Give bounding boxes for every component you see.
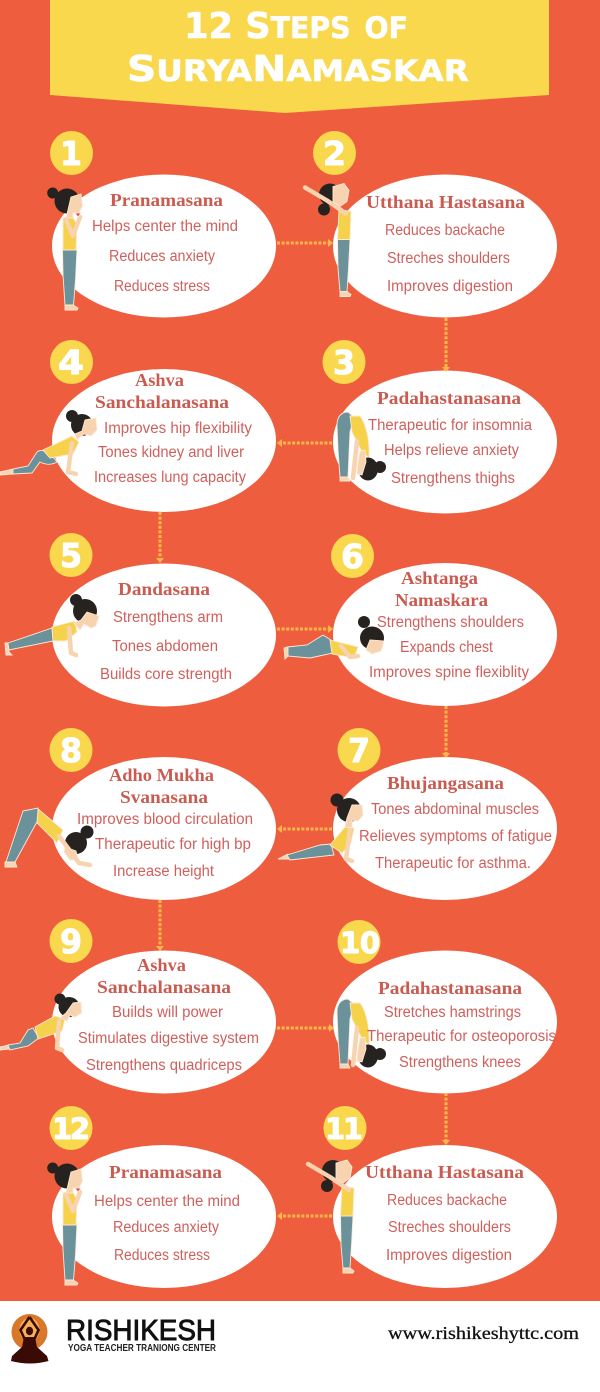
step 9 badge: 9 — [60, 922, 82, 961]
step 1 badge — [50, 131, 93, 175]
icon: raised arms pose — [305, 184, 351, 296]
panel: Dandasana step 5: Strengthens arm — [113, 609, 223, 626]
panel: Dandasana step 5 — [5, 564, 276, 706]
panel: Padahastanasana step 10: Stretches hamstrings — [384, 1004, 521, 1021]
arrow: 1 to 2 — [277, 239, 333, 247]
panel: Uttana Hastasana step 11: Utthana Hastasana — [365, 1162, 524, 1182]
panel: Uttana Hastasana step 11: Improves digestion — [386, 1247, 512, 1264]
title banner — [50, 0, 549, 113]
arrow: 7 to 8 — [277, 825, 332, 833]
step 3 badge — [322, 340, 366, 384]
arrow: 11 to 12 — [277, 1212, 332, 1220]
panel: Ashva Sanchalanasana step 9 — [0, 950, 276, 1094]
panel: Padahastanasana step 3: Strengthens thighs — [391, 470, 515, 487]
icon: standing prayer pose — [47, 188, 82, 310]
arrow: 5 to 6 — [277, 625, 333, 633]
step 4 badge: 4 — [58, 343, 84, 382]
panel: Adho Mukha Svanasana step 8: Therapeutic for high bp — [95, 836, 251, 853]
panel: Pranamasana step 1: Helps center the mind — [92, 218, 238, 235]
panel: Ashva Sanchalanasana step 9: Sanchalanasana — [97, 977, 231, 997]
panel: Padahastanasana step 3: Therapeutic for insomnia — [368, 417, 532, 434]
icon: eight limbs pose — [284, 616, 384, 659]
panel: Utthana Hastasana step 2: Improves digestion — [387, 278, 513, 295]
panel: Ashva Sanchalanasana step 9: Ashva — [137, 955, 186, 975]
panel: Bhujangasana step 7: Therapeutic for asthma. — [375, 855, 531, 872]
panel: Pranamasana step 12: Pranamasana — [109, 1162, 222, 1182]
panel: Padahastanasana step 10: Strengthens knees — [399, 1054, 521, 1071]
panel: Pranamasana step 1 — [47, 174, 276, 318]
panel: Bhujangasana step 7 — [278, 757, 557, 900]
step 5 badge: 5 — [60, 536, 82, 575]
panel: Bhujangasana step 7: Bhujangasana — [387, 773, 504, 793]
icon: plank pose — [5, 594, 99, 655]
panel: Padahastanasana step 3: Helps relieve anxiety — [384, 442, 519, 459]
panel: Pranamasana step 12: Helps center the mind — [94, 1193, 240, 1210]
panel: Ashva Sanchalanasana step 4: Sanchalanasana — [95, 392, 229, 412]
arrow: 2 to 3 — [442, 318, 450, 372]
panel: Ashva Sanchalanasana step 9: Stimulates digestive system — [78, 1030, 259, 1047]
panel: Pranamasana step 12: Reduces stress — [114, 1247, 210, 1264]
panel: Utthana Hastasana step 2: Streches shoulders — [387, 250, 510, 267]
panel: Dandasana step 5: Builds core strength — [100, 666, 232, 683]
step 7 badge — [338, 728, 380, 772]
step 2 badge — [313, 131, 356, 175]
step 2 badge: 2 — [323, 134, 346, 173]
panel: Ashva Sanchalanasana step 4 — [0, 369, 276, 512]
panel: Ashva Sanchalanasana step 9: Strengthens quadriceps — [86, 1057, 242, 1074]
panel: Uttana Hastasana step 11 — [308, 1145, 557, 1288]
panel: Adho Mukha Svanasana step 8: Increase height — [113, 863, 215, 880]
footer band: RISHIKESH — [66, 1315, 216, 1347]
panel: Utthana Hastasana step 2 — [305, 174, 557, 318]
arrow: 3 to 4 — [277, 439, 332, 447]
step 12 badge — [50, 1106, 92, 1150]
icon: raised arms pose — [308, 1160, 354, 1273]
step 4 badge — [50, 340, 93, 384]
icon: lunge pose — [0, 994, 82, 1050]
panel: Pranamasana step 1: Pranamasana — [110, 190, 223, 210]
panel: Ashva Sanchalanasana step 4: Ashva — [135, 370, 184, 390]
icon: forward bend pose — [337, 999, 386, 1068]
panel: Uttana Hastasana step 11: Streches shoulders — [388, 1219, 511, 1236]
step 1 badge: 1 — [60, 134, 82, 173]
icon: forward bend pose — [337, 412, 386, 481]
panel: Dandasana step 5: Tones abdomen — [112, 638, 218, 655]
panel: Ashva Sanchalanasana step 4: Increases lung capacity — [94, 469, 246, 486]
panel: Ashtanga Namaskara step 6: Namaskara — [395, 590, 488, 610]
footer band — [0, 1301, 600, 1392]
icon: downward dog pose — [5, 808, 94, 867]
arrow: 9 to 10 — [277, 1024, 334, 1032]
panel: Utthana Hastasana step 2: Reduces backache — [385, 222, 505, 239]
panel: Ashtanga Namaskara step 6 — [284, 563, 557, 706]
icon: lunge pose — [0, 410, 97, 475]
panel: Ashtanga Namaskara step 6: Expands chest — [400, 639, 494, 656]
step 11 badge — [324, 1106, 366, 1150]
panel: Adho Mukha Svanasana step 8: Improves blood circulation — [77, 811, 253, 828]
panel: Ashva Sanchalanasana step 4: Tones kidney and liver — [98, 444, 244, 461]
arrow: 10 to 11 — [442, 1093, 450, 1145]
panel: Pranamasana step 1: Reduces stress — [114, 278, 210, 295]
panel: Ashtanga Namaskara step 6: Ashtanga — [401, 568, 478, 588]
title banner: 12 Steps of — [184, 0, 408, 48]
step 6 badge: 6 — [341, 537, 364, 576]
panel: Uttana Hastasana step 11: Reduces backache — [387, 1192, 507, 1209]
step 8 badge — [50, 728, 92, 772]
arrow: 4 to 5 — [156, 512, 164, 563]
panel: Pranamasana step 12: Reduces anxiety — [113, 1219, 219, 1236]
panel: Adho Mukha Svanasana step 8: Svanasana — [120, 787, 208, 807]
panel: Ashtanga Namaskara step 6: Strengthens shoulders — [377, 614, 524, 631]
panel: Padahastanasana step 3: Padahastanasana — [377, 388, 521, 408]
step 5 badge — [50, 533, 92, 577]
panel: Pranamasana step 12 — [47, 1145, 276, 1288]
panel: Padahastanasana step 10: Padahastanasana — [378, 978, 522, 998]
panel: Adho Mukha Svanasana step 8 — [5, 757, 276, 900]
step 8 badge: 8 — [60, 731, 82, 770]
panel: Ashtanga Namaskara step 6: Improves spine flexiblity — [369, 664, 529, 681]
panel: Bhujangasana step 7: Relieves symptoms of fatigue — [359, 828, 552, 845]
arrow: 8 to 9 — [156, 900, 164, 951]
panel: Utthana Hastasana step 2: Utthana Hastasana — [366, 192, 525, 212]
panel: Pranamasana step 1: Reduces anxiety — [109, 248, 215, 265]
panel: Ashva Sanchalanasana step 9: Builds will power — [112, 1004, 223, 1021]
panel: Dandasana step 5: Dandasana — [118, 579, 210, 599]
icon: standing prayer pose — [47, 1162, 82, 1285]
step 7 badge: 7 — [348, 731, 370, 770]
panel: Adho Mukha Svanasana step 8: Adho Mukha — [109, 765, 214, 785]
icon: cobra pose — [278, 794, 363, 861]
step 12 badge: 12 — [52, 1112, 90, 1146]
panel: Padahastanasana step 10 — [333, 950, 557, 1094]
title banner: Surya Namaskar — [127, 43, 469, 91]
step 11 badge: 11 — [325, 1112, 363, 1146]
panel: Padahastanasana step 10: Therapeutic for osteoporosis — [367, 1028, 556, 1045]
icon: yoga logo — [11, 1314, 48, 1364]
panel: Bhujangasana step 7: Tones abdominal muscles — [371, 801, 539, 818]
step 3 badge: 3 — [333, 343, 355, 382]
footer band: www.rishikeshyttc.com — [388, 1323, 579, 1343]
step 9 badge — [50, 919, 92, 963]
step 6 badge — [331, 534, 374, 578]
footer band: YOGA TEACHER TRANIONG CENTER — [68, 1343, 217, 1354]
arrow: 6 to 7 — [442, 706, 450, 758]
panel: Ashva Sanchalanasana step 4: Improves hip flexibility — [104, 420, 252, 437]
step 10 badge: 10 — [340, 926, 380, 960]
panel: Padahastanasana step 3 — [333, 370, 557, 514]
